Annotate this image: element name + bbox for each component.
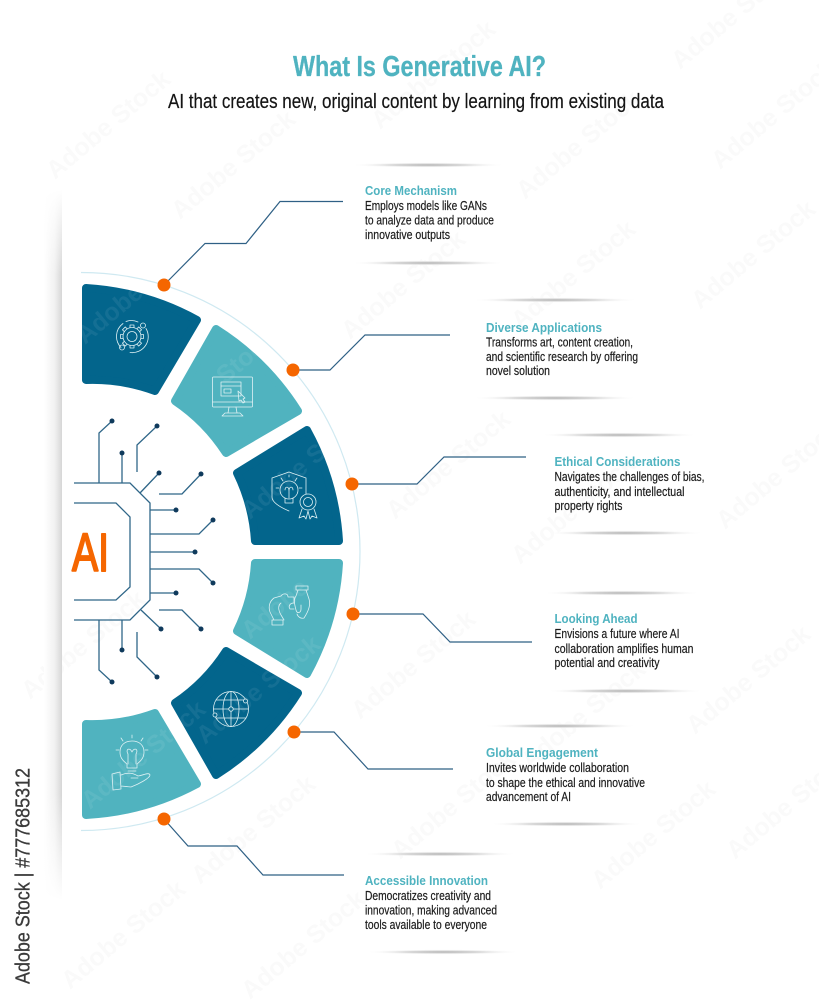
text: Adobe Stock (586, 775, 721, 895)
text block: ethical considerations (539, 432, 705, 536)
icon: gear with orbit (116, 321, 148, 353)
text block: accessible innovation (362, 852, 521, 954)
text: Adobe Stock (346, 605, 481, 725)
text block: core mechanism: Core Mechanism (365, 183, 457, 198)
text block: looking ahead: collaboration amplifies human (554, 642, 694, 656)
text block: diverse applications: and scientific research by offering (486, 350, 638, 364)
icon: hands joining puzzle (269, 586, 310, 625)
text: Adobe Stock (366, 15, 501, 135)
text block: diverse applications: Diverse Applications (486, 320, 602, 335)
icon: globe (213, 692, 248, 726)
title: What Is Generative AI? (293, 51, 546, 83)
segment 6: accessible innovation (86, 713, 197, 815)
segment shape (175, 329, 298, 453)
text block: looking ahead: Looking Ahead (554, 611, 638, 626)
text block: ethical considerations: Ethical Considerations (554, 454, 680, 469)
AI label: AI (72, 523, 109, 583)
text block: global engagement: Global Engagement (486, 745, 599, 760)
text: Adobe Stock (191, 630, 326, 750)
text block: core mechanism: Employs models like GANs (365, 199, 487, 213)
text: Adobe Stock (16, 585, 151, 705)
subtitle: AI that creates new, original content by learning from existing data (168, 91, 665, 113)
text block: accessible innovation: innovation, making advanced (365, 904, 497, 918)
orange connector dots (158, 278, 360, 826)
leader line 6 (164, 819, 344, 875)
text block: ethical considerations: property rights (554, 499, 622, 513)
text block: core mechanism (350, 162, 506, 266)
text block: looking ahead: potential and creativity (554, 656, 660, 670)
text block: accessible innovation: Democratizes creativity and (365, 889, 491, 903)
text: Adobe Stock (336, 225, 471, 345)
segment shape (237, 430, 339, 541)
text: Adobe Stock (381, 405, 516, 525)
segment shape (237, 563, 339, 674)
text: Stock (211, 324, 281, 390)
segment 2: diverse applications (175, 329, 298, 453)
text block: ethical considerations: authenticity, and intellectual (554, 485, 684, 499)
text block: accessible innovation: tools available to everyone (365, 918, 487, 932)
text: Adobe Stock (506, 215, 641, 335)
text: Adobe Stock (186, 770, 321, 890)
text block: diverse applications: Transforms art, content creation, (486, 336, 633, 350)
text: Adobe Stock (516, 655, 651, 775)
circuit traces (99, 421, 213, 682)
leader line 1 (164, 202, 343, 285)
text block: looking ahead: Envisions a future where AI (554, 627, 680, 641)
leader line 4 (353, 614, 532, 642)
text: Adobe Stock (71, 230, 206, 350)
segment 3: ethical considerations (237, 430, 339, 541)
text block: accessible innovation: Accessible Innovation (365, 873, 488, 888)
text block: global engagement: Invites worldwide collaboration (486, 761, 629, 775)
text block: looking ahead (542, 590, 705, 694)
icon: shield bulb and rosette (272, 472, 317, 519)
text block: global engagement: advancement of AI (486, 790, 571, 804)
text: Adobe Stock (41, 65, 176, 185)
leader line 3 (352, 457, 526, 484)
icon: monitor with cursor (212, 377, 252, 416)
text block: global engagement (482, 724, 645, 826)
text: Adobe Stock (76, 695, 211, 815)
text block: core mechanism: to analyze data and produce (365, 214, 494, 228)
segment shape (86, 713, 197, 815)
text: Adobe Stock (56, 875, 191, 995)
segment 1: core mechanism (86, 288, 197, 391)
text: Adobe Stock (166, 105, 301, 225)
text block: ethical considerations: Navigates the challenges of bias, (554, 470, 704, 484)
icon: hand holding bulb (112, 735, 150, 790)
text: Adobe Stock (386, 745, 521, 865)
text: Adobe Stock (511, 85, 646, 205)
segment shape (86, 288, 197, 391)
stock credit vertical text: Adobe Stock | #777685312 (12, 768, 34, 984)
text: Adobe (236, 573, 314, 645)
AI chip circuit (72, 418, 216, 684)
chip outline (74, 483, 150, 620)
text: Adobe Stock (506, 450, 641, 570)
text: Adobe Stock (236, 405, 371, 525)
outer ring arc (81, 272, 360, 830)
text: Adobe Stock (686, 195, 819, 315)
text: Adobe Stock (681, 620, 816, 740)
text block: diverse applications (471, 298, 639, 400)
leader line 2 (293, 335, 450, 370)
leader line 5 (294, 732, 453, 769)
segment 5: global engagement (175, 651, 298, 775)
segment 4: looking ahead (237, 563, 339, 674)
text block: global engagement: to shape the ethical and innovative (486, 776, 645, 790)
text block: diverse applications: novel solution (486, 364, 550, 378)
segment shape (175, 651, 298, 775)
text block: core mechanism: innovative outputs (365, 228, 450, 242)
circuit end dots (110, 418, 216, 684)
